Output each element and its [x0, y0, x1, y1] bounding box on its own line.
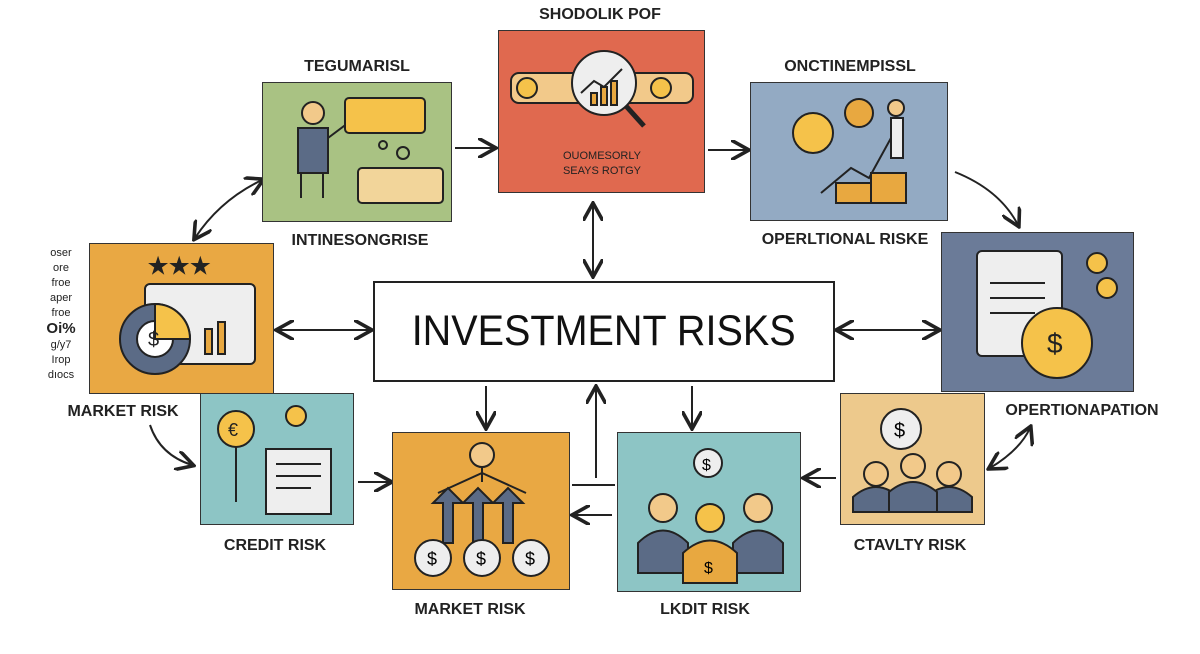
title box: INVESTMENT RISKS: [412, 307, 796, 355]
panel: bottom teal: $: [702, 457, 711, 474]
panel: bottom orange: [392, 432, 570, 590]
tiny side text: dıocs: [48, 369, 74, 381]
panel: bottom orange: $: [427, 549, 437, 569]
tiny side text: Irop: [52, 354, 70, 366]
panel: bottom teal: $: [704, 560, 713, 577]
heading: top center: SHODOLIK POF: [539, 6, 661, 23]
tiny side text: froe: [52, 307, 70, 319]
panel: top center red: SEAYS ROTGY: [563, 165, 642, 177]
panel: bottom orange: $: [476, 549, 486, 569]
heading: green: TEGUMARISL: [304, 58, 410, 75]
tiny side text: ore: [53, 262, 69, 274]
tiny side text: oser: [50, 247, 72, 259]
tiny side text: aper: [50, 292, 72, 304]
panel: left orange: $: [148, 329, 159, 351]
caption: market risk left: MARKET RISK: [67, 403, 179, 420]
panel: top right blue-gray: [750, 82, 948, 221]
caption: right: OPERTIONAPATION: [1005, 402, 1159, 419]
panel: right dark blue: $: [1047, 328, 1063, 359]
caption: credit: CREDIT RISK: [224, 537, 326, 554]
tiny side text: Oi%: [46, 320, 76, 337]
panel: top center red: [498, 30, 705, 193]
tiny side text: froe: [52, 277, 70, 289]
tiny side text: [46, 247, 76, 381]
heading: top right: ONCTINEMPISSL: [784, 58, 916, 75]
panel: credit teal: [200, 393, 354, 525]
title box: [373, 281, 835, 382]
panel: left orange: ★ ★ ★: [150, 256, 208, 276]
caption: top right: OPERLTIONAL RISKE: [762, 231, 928, 248]
tiny side text: g/y7: [51, 339, 71, 351]
caption: market bottom: MARKET RISK: [414, 601, 526, 618]
panel: bottom teal: [617, 432, 801, 592]
panel: bottom orange: $: [525, 549, 535, 569]
panel: right dark blue: [941, 232, 1134, 392]
panel: green: [262, 82, 452, 222]
panel: left orange: [89, 243, 274, 394]
caption: bottom teal: LKDIT RISK: [660, 601, 750, 618]
panel: credit teal: €: [228, 420, 238, 440]
panel: tan: [840, 393, 985, 525]
caption: tan: CTAVLTY RISK: [854, 537, 966, 554]
panel: top center red: OUOMESORLY: [563, 150, 642, 162]
caption: green: INTINESONGRISE: [292, 232, 428, 249]
panel: tan: $: [894, 420, 905, 442]
